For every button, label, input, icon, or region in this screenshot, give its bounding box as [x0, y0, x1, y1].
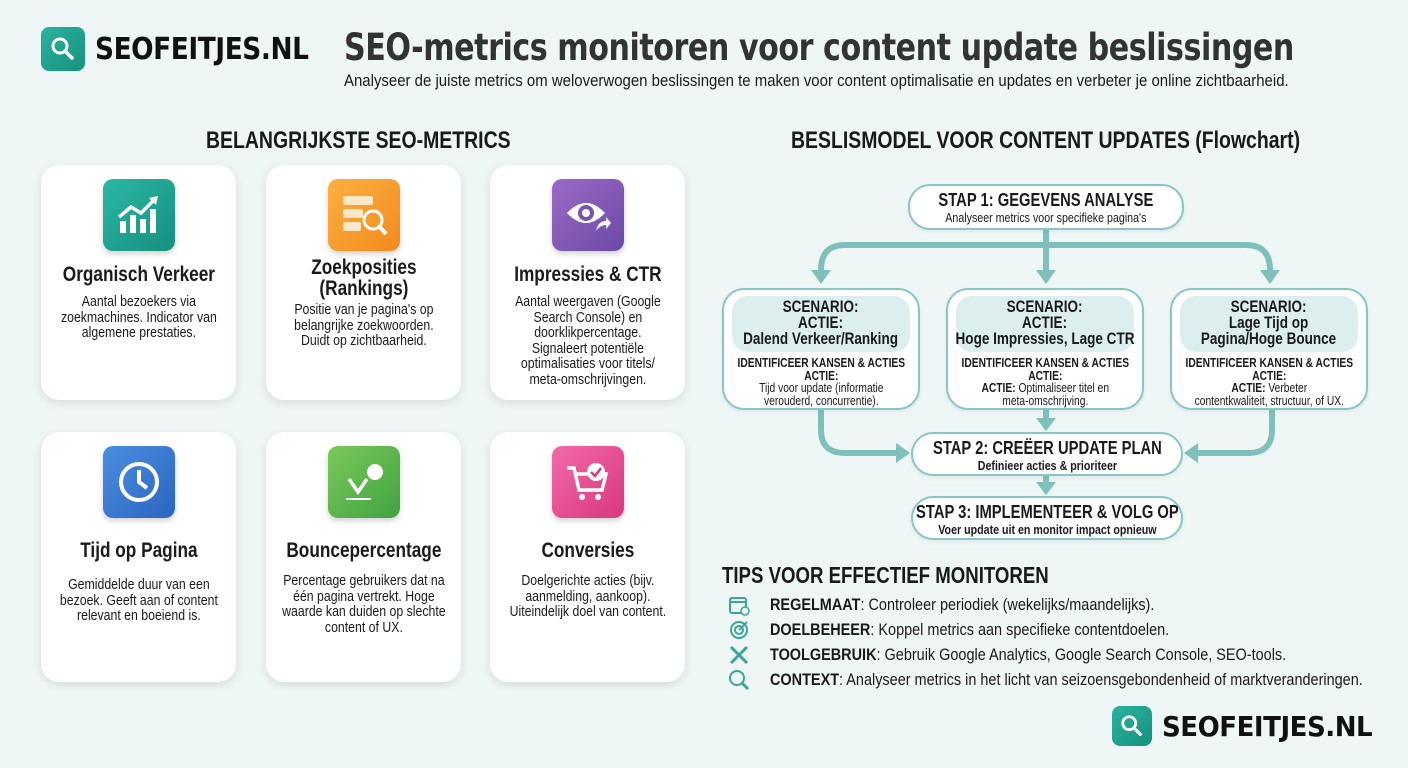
card: bounce: [266, 432, 461, 682]
scenario 2: IDENTIFICEER KANSEN & ACTIES: [961, 356, 1129, 370]
scenario 3: [1170, 288, 1368, 410]
scenario 2: Hoge Impressies, Lage CTR: [956, 330, 1135, 348]
title: SEO-metrics monitoren voor content update beslissingen: [344, 26, 1294, 69]
scenario 3: ACTIE: Verbeter: [1231, 381, 1307, 395]
card: impressies: Aantal weergaven (Google Search Console) en doorklikpercentage. Signaleert potentiële optimalisaties voor titels/ meta-omschrijvingen.: [515, 293, 660, 388]
scenario 1: IDENTIFICEER KANSEN & ACTIES: [737, 356, 905, 370]
card: zoekposities: Positie van je pagina's op belangrijke zoekwoorden. Duidt op zichtbaarheid.: [294, 301, 433, 349]
step 3: [911, 496, 1183, 540]
scenario 1: [722, 288, 920, 410]
scenario 2: ACTIE:: [1028, 368, 1062, 382]
card: bounce: Percentage gebruikers dat na één pagina vertrekt. Hoge waarde kan duiden op slechte content of UX.: [282, 572, 445, 636]
logo bottom: SEOFEITJES.NL: [1162, 710, 1372, 742]
icon: bounce: [328, 446, 400, 518]
scenario 2: ACTIE: Optimaliseer titel en: [981, 381, 1109, 395]
icon: rankings: [328, 179, 400, 251]
card: tijd op pagina: [41, 432, 236, 682]
scenario 3: Lage Tijd op: [1229, 314, 1309, 332]
scenario 3: ACTIE:: [1252, 368, 1286, 382]
card: organisch verkeer: [41, 165, 236, 400]
tip: toolgebruik: TOOLGEBRUIK: Gebruik Google Analytics, Google Search Console, SEO-tools.: [770, 645, 1286, 664]
scenario 2: SCENARIO:: [1007, 298, 1083, 316]
logo bottom: [1112, 706, 1372, 746]
scenario 2: [946, 288, 1144, 410]
scenario 3: Pagina/Hoge Bounce: [1201, 330, 1337, 348]
step 3: Voer update uit en monitor impact opnieuw: [938, 522, 1156, 537]
scenario 1: SCENARIO:: [783, 298, 859, 316]
card: zoekposities: (Rankings): [319, 277, 408, 300]
step 2: [911, 432, 1183, 476]
logo top: [41, 27, 308, 71]
card: organisch verkeer: Organisch Verkeer: [62, 263, 215, 286]
card: bounce: Bouncepercentage: [286, 539, 441, 562]
scenario 1: Tijd voor update (informatie: [759, 381, 883, 395]
scenario 1: ACTIE:: [804, 368, 838, 382]
card: conversies: [490, 432, 685, 682]
step 1: [908, 184, 1184, 230]
heading: flowchart: BESLISMODEL VOOR CONTENT UPDATES (Flowchart): [791, 127, 1300, 154]
icon: cart: [552, 446, 624, 518]
scenario 1: ACTIE:: [798, 314, 844, 332]
step 3: STAP 3: IMPLEMENTEER & VOLG OP: [916, 502, 1178, 522]
tip: context: CONTEXT: Analyseer metrics in het licht van seizoensgebondenheid of marktveranderingen.: [770, 670, 1363, 689]
icon: chart: [102, 179, 174, 251]
scenario 1: Dalend Verkeer/Ranking: [744, 330, 898, 348]
subtitle: Analyseer de juiste metrics om weloverwogen beslissingen te maken voor content optimalisatie en updates en verbeter je online zichtbaarheid.: [344, 71, 1289, 90]
scenario 1: verouderd, concurrentie).: [764, 394, 878, 408]
card: impressies: Impressies & CTR: [514, 263, 661, 286]
card: tijd op pagina: Gemiddelde duur van een bezoek. Geeft aan of content relevant en boeiend is.: [60, 576, 217, 624]
heading: tips: TIPS VOOR EFFECTIEF MONITOREN: [722, 562, 1049, 588]
step 2: STAP 2: CREËER UPDATE PLAN: [933, 438, 1161, 458]
card: zoekposities: [266, 165, 461, 400]
card: conversies: Doelgerichte acties (bijv. aanmelding, aankoop). Uiteindelijk doel van content.: [509, 572, 666, 620]
card: tijd op pagina: Tijd op Pagina: [80, 539, 197, 562]
icon: clock: [102, 446, 174, 518]
step 2: Definieer acties & prioriteer: [977, 458, 1117, 473]
tip: regelmaat: REGELMAAT: Controleer periodiek (wekelijks/maandelijks).: [770, 595, 1154, 614]
heading: metrics: BELANGRIJKSTE SEO-METRICS: [206, 127, 511, 154]
step 1: STAP 1: GEGEVENS ANALYSE: [939, 190, 1153, 210]
card: impressies: [490, 165, 685, 400]
card: organisch verkeer: Aantal bezoekers via zoekmachines. Indicator van algemene prestaties.: [61, 293, 216, 341]
card: conversies: Conversies: [541, 539, 634, 562]
tip: doelbeheer: DOELBEHEER: Koppel metrics aan specifieke contentdoelen.: [770, 620, 1169, 639]
card: zoekposities: Zoekposities: [311, 256, 416, 279]
scenario 3: IDENTIFICEER KANSEN & ACTIES: [1185, 356, 1353, 370]
step 1: Analyseer metrics voor specifieke pagina's: [945, 210, 1147, 225]
scenario 3: SCENARIO:: [1231, 298, 1307, 316]
logo top: SEOFEITJES.NL: [95, 32, 308, 66]
scenario 3: contentkwaliteit, structuur, of UX.: [1194, 394, 1344, 408]
icon: eye: [552, 179, 624, 251]
scenario 2: ACTIE:: [1022, 314, 1068, 332]
scenario 2: meta-omschrijving.: [1002, 394, 1088, 408]
